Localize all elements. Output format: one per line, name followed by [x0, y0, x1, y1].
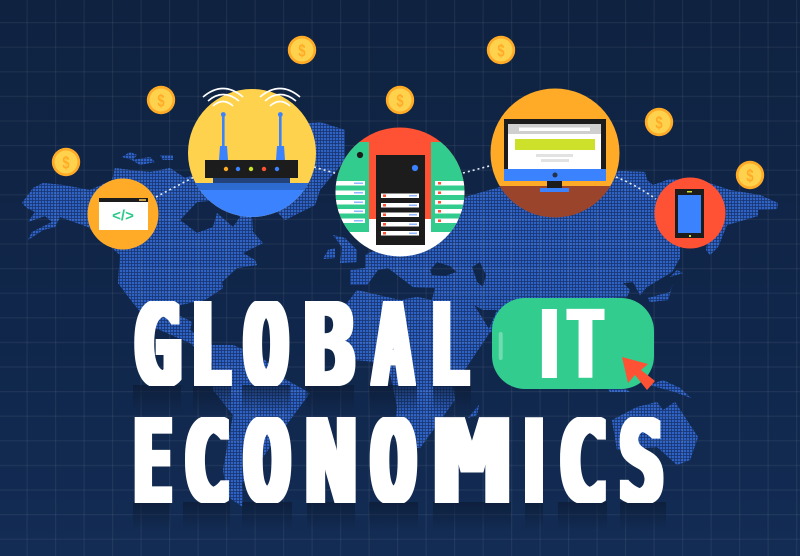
title shadows — [133, 385, 666, 530]
title: IT pill — [492, 288, 655, 400]
coin 2: $ — [157, 92, 165, 111]
coin 1 — [52, 148, 80, 176]
coin 6: $ — [655, 114, 663, 133]
title: ECONOMICS: E — [133, 396, 172, 530]
coin 4: $ — [396, 92, 404, 111]
title: GLOBAL: B — [304, 279, 355, 413]
title: ECONOMICS: C — [558, 395, 608, 529]
title: GLOBAL: L — [430, 278, 469, 413]
coin 6 — [645, 108, 673, 136]
icon: code window: </> — [112, 208, 134, 224]
title: GLOBAL: A — [373, 280, 413, 414]
title: ECONOMICS — [133, 393, 664, 530]
title: GLOBAL — [134, 278, 469, 414]
coin 3 — [288, 36, 316, 64]
icon: wifi router — [188, 88, 316, 217]
coin 5: $ — [497, 42, 505, 61]
coin 1: $ — [62, 154, 70, 173]
icon: server rack — [335, 127, 465, 257]
icon: smartphone — [654, 178, 726, 248]
title: ECONOMICS: I — [524, 393, 544, 529]
coin 2 — [147, 86, 175, 114]
title: GLOBAL: G — [134, 280, 182, 413]
title: GLOBAL: O — [243, 279, 289, 413]
title: ECONOMICS: M — [433, 395, 511, 529]
icon: code window — [88, 178, 158, 250]
title: ECONOMICS: N — [305, 395, 357, 529]
title: ECONOMICS: S — [619, 395, 664, 529]
coin 7 — [736, 161, 764, 189]
title: ECONOMICS: C — [183, 396, 231, 530]
coin 5 — [487, 36, 515, 64]
title: ECONOMICS: O — [370, 396, 417, 530]
coin 3: $ — [298, 42, 306, 61]
icon: desktop monitor — [490, 88, 620, 219]
connector dotted lines — [156, 165, 656, 199]
coin 4 — [386, 86, 414, 114]
title: ECONOMICS: O — [243, 396, 291, 530]
world map — [22, 122, 778, 507]
title: IT pill: T — [569, 289, 602, 400]
title: GLOBAL: L — [191, 280, 231, 414]
title: IT pill: I — [541, 288, 558, 400]
coin 7: $ — [746, 167, 754, 186]
